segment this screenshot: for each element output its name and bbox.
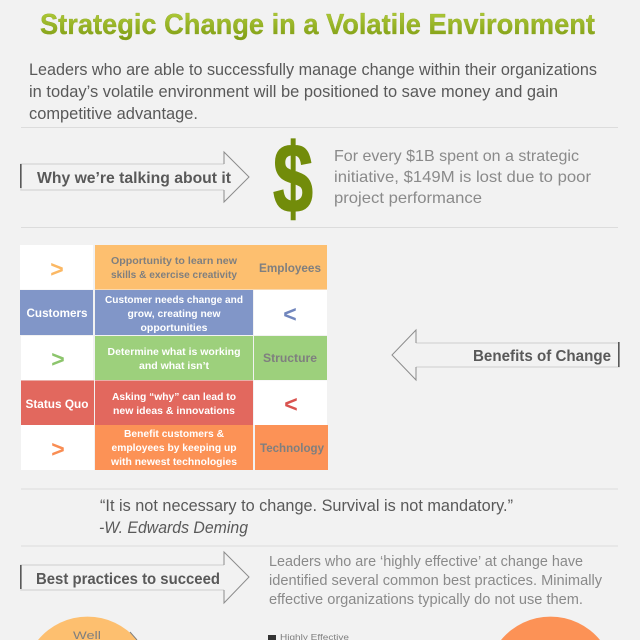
row: customers (20, 290, 327, 335)
arrow: benefits of change: Benefits of Change (473, 348, 611, 365)
row: employees (20, 245, 327, 290)
quote (99, 497, 513, 537)
best practices text (269, 554, 603, 608)
row: customers: Customer needs change and (105, 294, 243, 306)
row: customers: opportunities (140, 322, 208, 334)
statistic text (334, 148, 592, 207)
row: status quo (21, 380, 327, 425)
icon: dollar sign: $ (273, 123, 313, 233)
arrow: benefits of change (392, 330, 620, 380)
statistic text: project performance (334, 190, 482, 207)
row: employees: skills & exercise creativity (111, 269, 237, 281)
intro text: competitive advantage. (29, 105, 198, 123)
chart legend (268, 633, 350, 640)
row: structure: > (51, 346, 65, 372)
row: technology (21, 425, 328, 470)
row: technology: employees by keeping up (112, 442, 236, 454)
best practices text: identified several common best practices. Minimally (269, 573, 603, 589)
arrow: best practices to succeed: Best practices to succeed (36, 571, 220, 588)
row: technology: Technology (260, 441, 324, 455)
row: customers: grow, creating new (128, 308, 221, 320)
row: technology: Benefit customers & (124, 428, 224, 440)
best practices text: Leaders who are ‘highly effective’ at change have (269, 554, 583, 570)
row: structure (21, 336, 327, 380)
arrow: best practices to succeed (20, 552, 249, 603)
row: structure: Determine what is working (108, 346, 240, 358)
row: status quo: < (284, 391, 298, 417)
benefits table (20, 245, 328, 470)
quote: “It is not necessary to change. Survival is not mandatory.” (100, 497, 513, 515)
best practices text: effective organizations typically do not use them. (269, 592, 583, 608)
quote: -W. Edwards Deming (99, 519, 249, 537)
row: employees: Employees (259, 261, 321, 275)
arrow: why we're talking about it: Why we’re talking about it (37, 170, 231, 187)
row: employees: > (50, 256, 64, 282)
row: status quo: new ideas & innovations (113, 405, 235, 417)
circle: right (501, 617, 600, 640)
intro text (29, 61, 597, 123)
row: employees: Opportunity to learn new (111, 255, 238, 267)
statistic text: For every $1B spent on a strategic (334, 148, 579, 165)
row: structure: and what isn’t (139, 360, 209, 372)
row: customers: < (283, 301, 297, 327)
row: status quo: Status Quo (26, 397, 88, 411)
row: customers: Customers (26, 306, 88, 320)
row: technology: with newest technologies (110, 456, 237, 468)
title: Strategic Change in a Volatile Environment (40, 9, 595, 41)
row: structure: Structure (263, 351, 317, 365)
row: status quo: Asking “why” can lead to (112, 391, 236, 403)
intro text: in today’s volatile environment will be positioned to save money and gain (29, 83, 558, 101)
intro text: Leaders who are able to successfully manage change within their organizations (29, 61, 597, 79)
circle: well (38, 617, 137, 640)
statistic text: initiative, $149M is lost due to poor (334, 169, 592, 186)
arrow: why we're talking about it (20, 152, 249, 202)
row: technology: > (51, 436, 65, 462)
